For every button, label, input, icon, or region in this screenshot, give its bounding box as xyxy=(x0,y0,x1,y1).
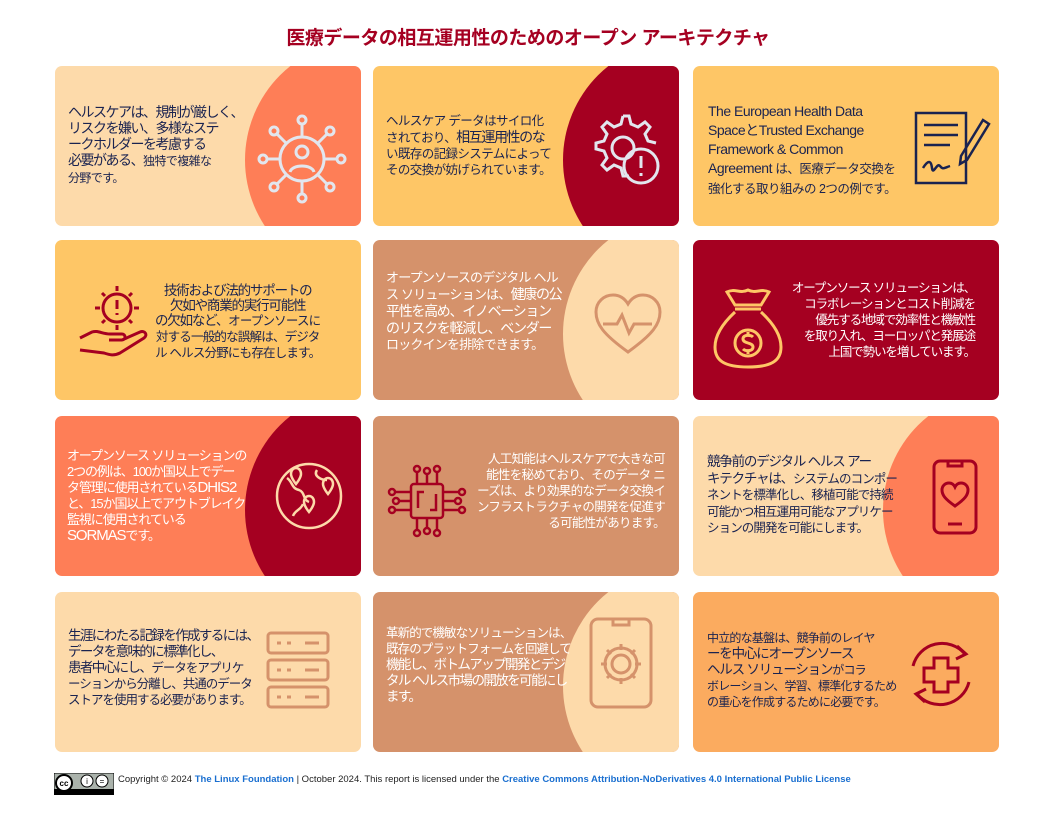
icon: money bag xyxy=(714,288,782,368)
text xyxy=(68,104,243,185)
text: ンフラストラクチャの開発を促進す xyxy=(477,500,665,514)
icon: phone gear xyxy=(590,618,652,708)
text: 強化する取り組みの 2つの例です。 xyxy=(708,182,896,196)
text: ボレーション、学習、標準化するため xyxy=(707,679,896,693)
text: ークホルダーを考慮する xyxy=(68,136,206,152)
footer xyxy=(54,773,851,795)
text: ーズは、より効果的なデータ交換イ xyxy=(477,484,665,498)
text: コラボレーションとコスト削減を xyxy=(804,297,975,311)
text: 能性を秘めており、そのデータ ニ xyxy=(486,468,665,482)
text: 生涯にわたる記録を作成するには、 xyxy=(68,628,258,643)
text xyxy=(792,281,976,359)
text: The European Health Data xyxy=(708,103,863,119)
panel: EHDS xyxy=(693,66,999,226)
icon: cc license xyxy=(54,773,114,795)
text: 平性を高め、イノベーション xyxy=(386,303,551,319)
text: ます。 xyxy=(386,689,420,704)
text xyxy=(386,270,562,352)
icon: server xyxy=(266,632,330,708)
text: ネントを標準化し、移植可能で持続 xyxy=(707,488,893,502)
text xyxy=(477,452,665,530)
panel: momentum xyxy=(693,240,999,400)
text: データを意味的に標準化し、 xyxy=(68,644,223,659)
text xyxy=(707,631,896,709)
text: の重心を作成するために必要です。 xyxy=(707,695,885,709)
text: 革新的で機敏なソリューションは、 xyxy=(386,626,571,640)
text: ロックインを排除できます。 xyxy=(386,337,543,352)
panel: lifelong records xyxy=(55,592,361,752)
text xyxy=(386,626,571,704)
text: されており、相互運用性のな xyxy=(386,129,544,145)
text: SORMASです。 xyxy=(67,527,160,544)
text: オープンソース ソリューションの xyxy=(67,448,246,463)
panel: neutral foundation xyxy=(693,592,999,752)
panel: pre-competitive xyxy=(693,416,999,576)
text: ーションから分離し、共通のデータ xyxy=(68,677,252,691)
icon: gear alert xyxy=(594,114,660,184)
text: 対する一般的な誤解は、デジタ xyxy=(156,330,319,344)
panel: AI xyxy=(373,416,679,576)
text: い既存の記録システムによって xyxy=(386,147,551,161)
text: ス ソリューションは、健康の公 xyxy=(386,286,561,302)
text: キテクチャは、システムのコンポー xyxy=(707,470,897,486)
text: 欠如や商業的実行可能性 xyxy=(170,298,305,313)
text: 優先する地域で効率性と機敏性 xyxy=(815,313,975,327)
text: ヘルス ソリューションがコラ xyxy=(707,662,866,677)
text: る可能性があります。 xyxy=(548,516,665,530)
icon: chip xyxy=(388,464,466,538)
icon: cycle plus xyxy=(912,642,970,706)
text: ヘルスケアは、規制が厳しく、 xyxy=(68,104,243,120)
text: リスクを嫌い、多様なステ xyxy=(68,120,218,136)
icon: network person xyxy=(258,114,346,204)
text: Agreement は、医療データ交換を xyxy=(708,160,895,176)
text: 患者中心にし、データをアプリケ xyxy=(68,660,243,675)
text: ストアを使用する必要があります。 xyxy=(68,693,251,707)
text: オープンソース ソリューションは、 xyxy=(792,281,975,295)
text: 監視に使用されている xyxy=(67,512,186,527)
copyright text: Copyright © 2024 The Linux Foundation | October 2024. This report is licensed under the Creative Commons Attribution-NoDerivatives 4.0 International Public License xyxy=(118,774,851,785)
text: 分野です。 xyxy=(68,171,124,185)
icon: cc license: i xyxy=(86,777,88,786)
icon: heart pulse xyxy=(594,294,662,354)
text: 競争前のデジタル ヘルス アー xyxy=(707,454,871,469)
text xyxy=(155,283,320,360)
text: を取り入れ、ヨーロッパと発展途 xyxy=(804,329,975,343)
text: ル ヘルス分野にも存在します。 xyxy=(155,346,320,360)
text: 人工知能はヘルスケアで大きな可 xyxy=(488,452,665,466)
text: 必要がある、独特で複雑な xyxy=(68,152,211,168)
text: のリスクを軽減し、ベンダー xyxy=(386,320,551,336)
text: その交換が妨げられています。 xyxy=(386,163,551,177)
text: 可能かつ相互運用可能なアプリケー xyxy=(707,504,893,518)
text: 上国で勢いを増しています。 xyxy=(828,345,975,359)
text: ヘルスケア データはサイロ化 xyxy=(386,114,544,128)
text xyxy=(68,628,258,707)
text: 技術および法的サポートの xyxy=(164,283,311,298)
text: オープンソースのデジタル ヘル xyxy=(386,270,558,285)
text xyxy=(707,454,897,535)
icon: cc license: cc xyxy=(60,779,69,788)
title: 医療データの相互運用性のためのオープン アーキテクチャ xyxy=(286,28,770,49)
text: タル ヘルス市場の開放を可能にし xyxy=(386,673,567,688)
panel: equity xyxy=(373,240,679,400)
text: ションの開発を可能にします。 xyxy=(707,521,868,535)
icon: document pen xyxy=(914,112,991,184)
text: Framework & Common xyxy=(708,141,843,157)
icon: cc license: = xyxy=(100,777,105,786)
icon: hand gear xyxy=(79,286,148,356)
text: 機能し、ボトムアップ開発とデジ xyxy=(386,657,564,672)
text: 2つの例は、100か国以上でデー xyxy=(67,464,234,479)
panel: regulated xyxy=(55,66,361,226)
panel: silos xyxy=(373,66,679,226)
panel: bottom-up xyxy=(373,592,679,752)
text: タ管理に使用されているDHIS2 xyxy=(67,479,236,496)
text: 既存のプラットフォームを回避して xyxy=(386,642,571,656)
text: ーを中心にオープンソース xyxy=(707,646,853,661)
icon: phone heart xyxy=(932,460,978,534)
text: 中立的な基盤は、競争前のレイヤ xyxy=(707,631,875,645)
icon: globe pins xyxy=(276,462,342,530)
text xyxy=(708,103,896,196)
text xyxy=(386,114,551,177)
panel: misconceptions xyxy=(55,240,361,400)
text: と、15か国以上でアウトブレイク xyxy=(67,496,245,511)
text: SpaceとTrusted Exchange xyxy=(708,122,864,138)
text: の欠如など、オープンソースに xyxy=(155,313,320,328)
text xyxy=(67,448,246,544)
panel: examples xyxy=(55,416,361,576)
